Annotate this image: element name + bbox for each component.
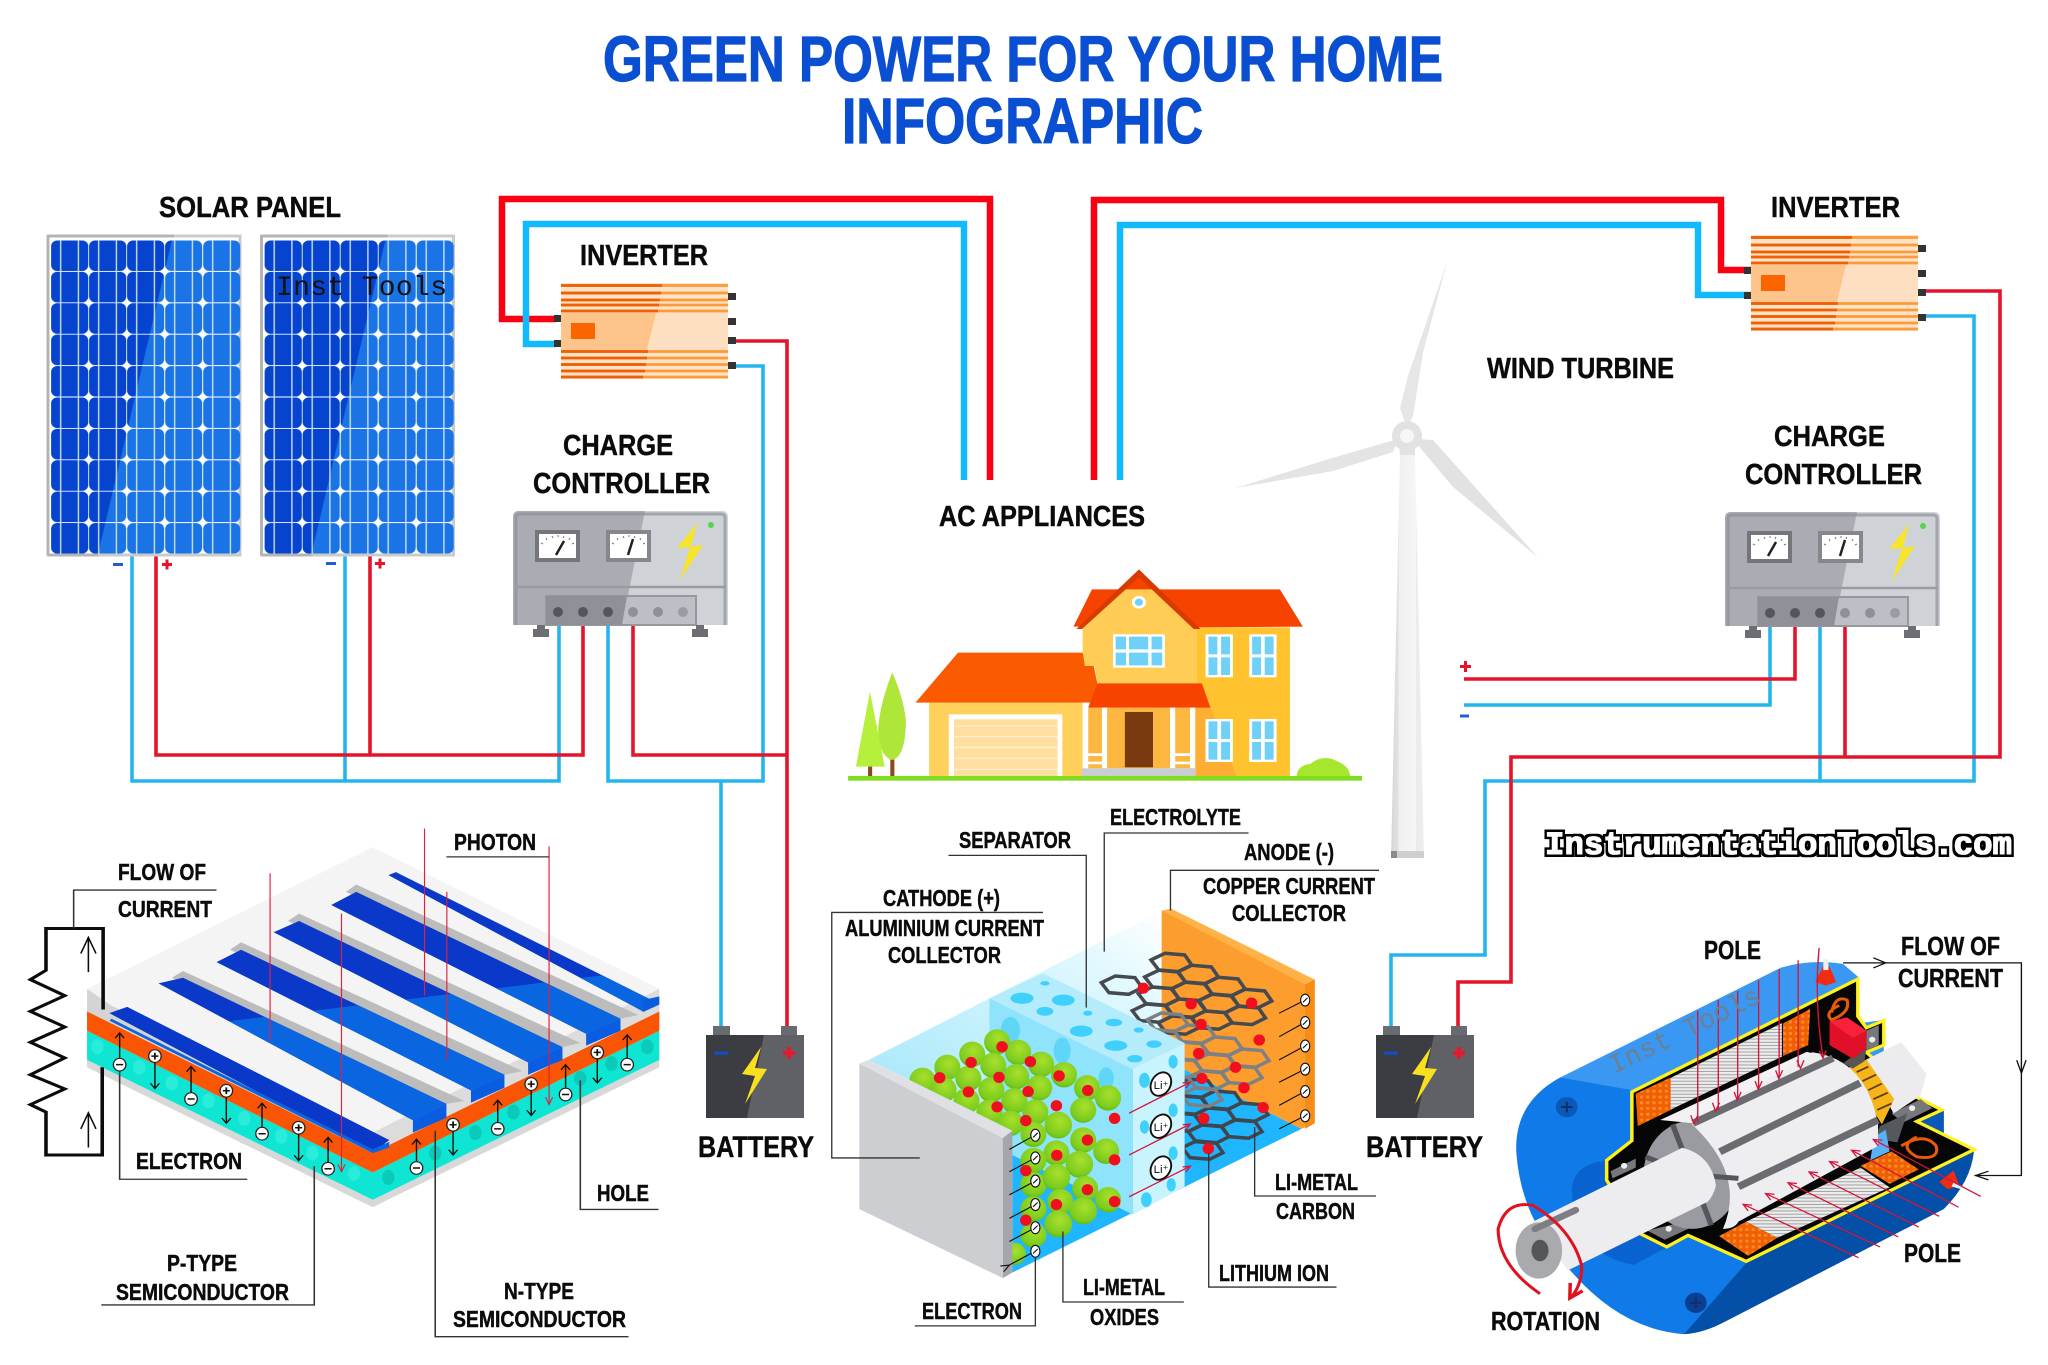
panel: DC generator diagram (1498, 948, 2026, 1334)
heading: wind turbine: WIND TURBINE (1487, 353, 1674, 385)
PV labels: SEMICONDUCTOR (453, 1306, 626, 1332)
battery diagram labels: COPPER CURRENT (1203, 873, 1375, 899)
lithium ion badges: Li⁺ (1154, 1080, 1169, 1092)
windows (1113, 634, 1277, 762)
lithium ion badges: Li⁺ (1154, 1122, 1169, 1134)
lithium ion badges: Li⁺ (1154, 1164, 1169, 1176)
battery right (1376, 1026, 1474, 1118)
bearings (1611, 1025, 1932, 1240)
solar panel left (47, 236, 241, 555)
heading: charge controller right (1745, 421, 1922, 491)
PV labels: SEMICONDUCTOR (116, 1279, 289, 1305)
battery diagram labels: LI-METAL (1083, 1274, 1165, 1300)
heading: solar panel: SOLAR PANEL (159, 192, 341, 224)
heading: charge controller right: CONTROLLER (1745, 459, 1922, 491)
cutaway interior (1607, 979, 1974, 1261)
charge controller right (1725, 512, 1940, 638)
magnetic flux arrows (1691, 948, 1981, 1258)
lower graphite sheet (1161, 1079, 1268, 1159)
brushes and terminals (1815, 959, 1963, 1189)
battery diagram labels: SEPARATOR (959, 827, 1071, 853)
battery diagram labels: COLLECTOR (888, 942, 1001, 968)
top contact grid (87, 847, 659, 1153)
PV labels: CURRENT (118, 896, 212, 922)
generator labels (1491, 931, 2003, 1336)
solar panel right (260, 236, 454, 555)
electrolyte and floor (869, 911, 1301, 1272)
blue absorber strips (109, 872, 659, 1153)
battery left (706, 1026, 804, 1118)
heading: AC appliances: AC APPLIANCES (939, 501, 1145, 533)
heading: charge controller right: CHARGE (1774, 421, 1885, 453)
PV labels: P-TYPE (167, 1250, 237, 1276)
battery diagram labels: ANODE (-) (1244, 839, 1334, 865)
battery diagram labels: CATHODE (+) (883, 885, 1000, 911)
house (848, 569, 1362, 781)
wind turbine (1236, 262, 1538, 858)
battery diagram labels (845, 804, 1375, 1330)
PV labels: N-TYPE (504, 1278, 574, 1304)
heading: charge controller left: CHARGE (563, 430, 673, 462)
wiring: AC lines from solar inverter to appliances (502, 199, 990, 480)
battery diagram labels: ALUMINIUM CURRENT (845, 915, 1044, 941)
generator labels: POLE (1904, 1238, 1961, 1268)
photon rays (270, 829, 553, 1172)
PV labels: PHOTON (454, 829, 536, 855)
heading: inverter left: INVERTER (580, 240, 708, 272)
heading: inverter right: INVERTER (1771, 192, 1900, 224)
battery diagram labels: LI-METAL (1275, 1169, 1358, 1195)
leader lines (832, 833, 1379, 1326)
garage (915, 653, 1101, 777)
leader lines (74, 857, 658, 1337)
rotor rear shaft and commutator (1847, 1042, 1926, 1160)
pole windings (1636, 999, 1937, 1256)
upper graphite sheet (1101, 953, 1272, 1034)
wiring: solar side DC lines (132, 341, 787, 1030)
ground (848, 776, 1362, 781)
aluminium collector (859, 1060, 1012, 1278)
ion transfer arrows (1129, 1082, 1190, 1197)
watermark on generator: Inst Tools (1605, 983, 1766, 1082)
generator labels: FLOW OF (1901, 931, 2000, 961)
generator labels: CURRENT (1898, 963, 2003, 993)
panel: lithium-ion battery diagram (832, 833, 1379, 1326)
PV labels: FLOW OF (118, 859, 206, 885)
inverter left (554, 283, 736, 379)
title (603, 23, 1443, 157)
title: GREEN POWER FOR YOUR HOME (603, 23, 1443, 95)
shaft (1516, 1148, 1716, 1279)
battery diagram labels: COLLECTOR (1232, 900, 1346, 926)
graphite layers (1101, 953, 1272, 1159)
electrons and arrows (1009, 994, 1310, 1265)
heading: charge controller left: CONTROLLER (533, 468, 710, 500)
copper collector (1162, 909, 1315, 1187)
charge controller left (513, 511, 728, 637)
watermark on panel: Inst Tools (276, 273, 447, 304)
site watermark: InstrumentationTools.com (1545, 827, 2012, 864)
wiring: AC lines from wind inverter to appliances (1094, 200, 1751, 480)
PV labels: ELECTRON (136, 1148, 242, 1174)
separator block (989, 973, 1185, 1215)
current flow line (1843, 958, 2026, 1180)
resistor circuit (30, 928, 103, 1155)
wiring: wind side DC lines (1391, 291, 2000, 1030)
housing (1516, 962, 1974, 1334)
PV labels: HOLE (597, 1180, 649, 1206)
trees (856, 672, 906, 777)
main house (1073, 569, 1303, 777)
middle graphite sheet (1141, 1013, 1269, 1106)
rotation arrow (1498, 1205, 1583, 1298)
battery diagram labels: OXIDES (1090, 1304, 1159, 1330)
label: battery left: BATTERY (698, 1131, 814, 1164)
bush (1297, 758, 1350, 777)
heading: charge controller left (533, 430, 710, 500)
battery diagram labels: LITHIUM ION (1219, 1260, 1329, 1286)
lithium dots (934, 983, 1269, 1226)
label: battery right: BATTERY (1366, 1131, 1483, 1164)
battery diagram labels: ELECTROLYTE (1110, 804, 1241, 830)
lithium ion badges (1147, 1069, 1175, 1183)
battery diagram labels: ELECTRON (922, 1298, 1022, 1324)
polarity marks (113, 558, 385, 570)
title: INFOGRAPHIC (842, 85, 1203, 157)
panel: photovoltaic cell diagram (30, 829, 659, 1337)
PV labels (116, 829, 649, 1332)
green active material spheres (909, 1029, 1121, 1265)
generator labels: POLE (1704, 935, 1761, 965)
charges and arrows (115, 1033, 632, 1163)
base layers (87, 1011, 659, 1207)
rotor (1643, 1052, 1878, 1229)
battery diagram labels: CARBON (1276, 1198, 1355, 1224)
inverter right (1744, 235, 1926, 331)
generator labels: ROTATION (1491, 1306, 1600, 1336)
